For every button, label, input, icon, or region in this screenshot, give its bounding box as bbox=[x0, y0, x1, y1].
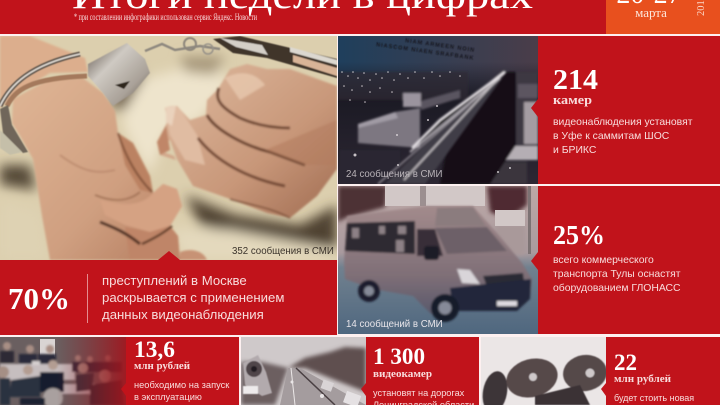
panel: 1 300 cameras bbox=[361, 337, 479, 405]
description: и БРИКС bbox=[553, 145, 597, 156]
panel: main statistic bbox=[0, 251, 337, 335]
figure 13,6: 13,6 bbox=[134, 337, 175, 362]
description: оборудованием ГЛОНАСС bbox=[553, 282, 681, 294]
date box bbox=[606, 0, 720, 34]
panel: handcuffs photo bbox=[0, 36, 337, 260]
handcuffs bbox=[0, 36, 337, 155]
panel: 214 cameras: камер bbox=[553, 92, 592, 107]
panel: 22 million: млн рублей bbox=[614, 373, 672, 385]
figure 70%: 70% bbox=[8, 281, 70, 316]
panel: 13,6 million: млн рублей bbox=[134, 360, 191, 372]
description: раскрывается с применением bbox=[102, 290, 284, 305]
forearm bbox=[0, 36, 88, 108]
panel: city photo bbox=[338, 36, 538, 184]
rooftop sign: NIASCOM NIAEN SRAFBANK bbox=[376, 42, 475, 62]
panel: 22 million bbox=[601, 337, 720, 405]
panel: 1 300 cameras: видеокамер bbox=[373, 368, 432, 380]
panel: 13,6 million bbox=[121, 337, 239, 405]
left hand bbox=[12, 78, 207, 260]
figure 214: 214 bbox=[553, 65, 598, 96]
description: установят на дорогах bbox=[373, 388, 465, 398]
description: в эксплуатацию bbox=[134, 392, 202, 402]
description: данных видеонаблюдения bbox=[102, 307, 264, 322]
panel: road camera photo bbox=[241, 337, 366, 405]
description: будет стоить новая bbox=[614, 393, 694, 403]
subtitle note: * при составлении инфографики использован сервис Яндекс. Новости bbox=[74, 12, 257, 22]
panel: loudspeakers photo bbox=[480, 337, 609, 405]
illuminated road bbox=[378, 70, 508, 184]
figure 25%: 25% bbox=[553, 220, 605, 250]
source count: minibus: 14 сообщений в СМИ bbox=[346, 319, 443, 330]
rooftop sign: NIAM ARMEEN NOIN bbox=[405, 38, 475, 54]
panel: 25% GLONASS bbox=[531, 186, 720, 334]
description: в Уфе к саммитам ШОС bbox=[553, 130, 670, 142]
right hand bbox=[157, 64, 337, 218]
city lights bbox=[341, 71, 511, 173]
description: необходимо на запуск bbox=[134, 380, 230, 390]
description: преступлений в Москве bbox=[102, 273, 247, 288]
surveillance camera bbox=[243, 355, 272, 396]
figure 22: 22 bbox=[614, 350, 637, 375]
panel: meeting photo bbox=[0, 337, 126, 405]
panel: 214 cameras bbox=[531, 36, 720, 184]
minibus bbox=[344, 206, 532, 322]
description: всего коммерческого bbox=[553, 255, 654, 266]
description: видеонаблюдения установят bbox=[553, 116, 693, 128]
source count: city: 24 сообщения в СМИ bbox=[346, 169, 442, 180]
header band bbox=[0, 0, 720, 34]
source count: hands: 352 сообщения в СМИ bbox=[232, 246, 334, 257]
panel: minibus photo bbox=[338, 186, 538, 334]
figure 1 300: 1 300 bbox=[373, 344, 425, 369]
description: транспорта Тулы оснастят bbox=[553, 269, 681, 280]
date box: марта bbox=[635, 5, 667, 20]
